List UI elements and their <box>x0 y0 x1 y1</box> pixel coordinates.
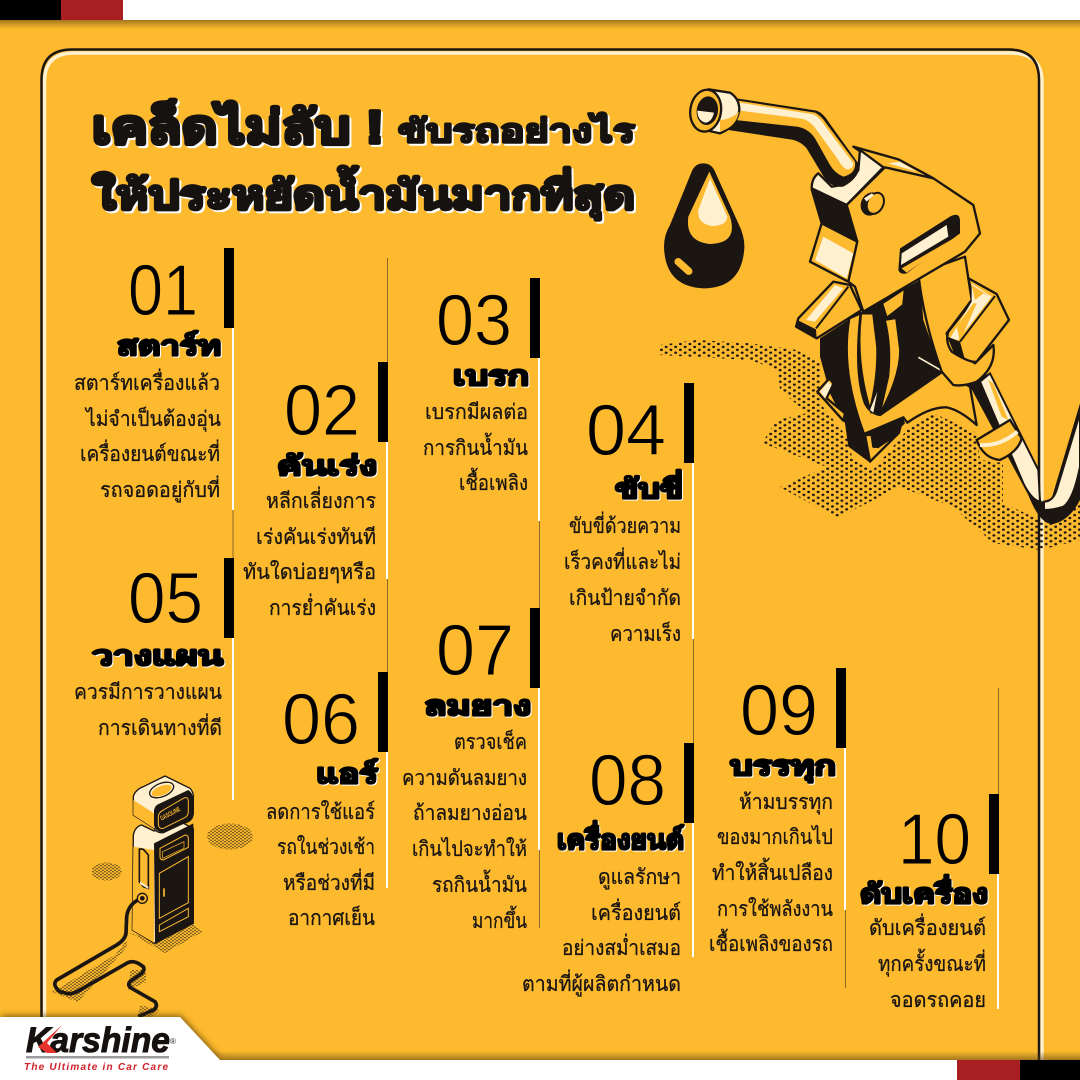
pump head <box>133 776 193 833</box>
item 02 <box>243 258 388 672</box>
dotted shadow under nozzle <box>660 340 1080 550</box>
logo: Karshine: ® <box>170 1037 176 1046</box>
logo: Karshine: The Ultimate in Car Care <box>24 1062 168 1073</box>
item 01: ไม่จำเป็นต้องอุ่น <box>84 405 221 432</box>
item 04: ขับขี่ด้วยความ <box>569 511 681 538</box>
number marker <box>530 278 540 608</box>
illustration: fuel nozzle <box>688 88 1080 524</box>
top colour strip <box>0 0 1080 29</box>
item 05 <box>74 558 234 800</box>
item 03: การกินน้ำมัน <box>423 433 528 460</box>
item 10: 10 <box>898 800 971 880</box>
number marker <box>530 608 540 928</box>
item 07: 07 <box>436 611 514 691</box>
item 05: 05 <box>128 559 203 639</box>
item 07 <box>402 608 540 933</box>
logo panel <box>0 1017 240 1080</box>
number marker <box>378 258 388 672</box>
item 02: หลีกเลี่ยงการ <box>266 486 376 513</box>
number marker <box>378 672 388 888</box>
logo: Karshine: Karshine <box>26 1021 170 1060</box>
item 09: ของมากเกินไป <box>717 825 833 849</box>
hose <box>967 373 1080 524</box>
item 08: ดูแลรักษา <box>598 866 681 890</box>
item 08: 08 <box>589 741 666 821</box>
item 06: 06 <box>282 680 360 760</box>
item 04: 04 <box>586 391 666 471</box>
title: ขับรถอย่างไร <box>398 112 635 149</box>
item 01: รถจอดอยู่กับที่ <box>100 475 220 503</box>
item 10: ดับเครื่อง <box>860 874 988 909</box>
fuel slot <box>898 215 960 274</box>
item 06: หรือช่วงที่มี <box>283 868 375 895</box>
item 01: 01 <box>128 251 198 331</box>
item 09: ห้ามบรรทุก <box>739 791 833 815</box>
item 07: มากขึ้น <box>472 906 527 933</box>
title: เคล็ดไม่ลับ ! <box>92 99 384 153</box>
item 02: ทันใดบ่อยๆหรือ <box>243 560 376 584</box>
bolt <box>857 189 885 219</box>
spout <box>688 88 859 187</box>
number marker <box>836 668 846 988</box>
item 06: ลดการใช้แอร์ <box>266 800 375 824</box>
item 06 <box>266 672 388 930</box>
number marker <box>989 688 999 1009</box>
number marker <box>684 743 694 957</box>
item 01: สตาร์ทเครื่องแล้ว <box>74 368 220 395</box>
number marker <box>684 383 694 743</box>
item 08: เครื่องยนต์ <box>591 898 681 925</box>
item 08 <box>522 741 694 997</box>
illustration: fuel drop <box>664 163 744 288</box>
number marker <box>224 558 234 800</box>
item 06: อากาศเย็น <box>288 904 375 930</box>
number marker <box>224 248 234 558</box>
title <box>92 99 635 221</box>
item 10: จอดรถคอย <box>890 989 986 1012</box>
illustration: fuel pump <box>52 776 253 1018</box>
item 10 <box>860 688 999 1012</box>
item 07: เกินไปจะทำให้ <box>412 837 527 861</box>
item 03 <box>423 278 540 608</box>
item 08: เครื่องยนต์ <box>557 820 684 855</box>
pump body <box>132 823 193 943</box>
item 01: เครื่องยนต์ขณะที่ <box>80 439 220 466</box>
item 01: สตาร์ท <box>117 330 221 361</box>
upper body <box>810 147 980 318</box>
hose <box>55 898 156 1017</box>
item 09: เชื้อเพลิงของรถ <box>709 929 833 956</box>
item 08: อย่างสม่ำเสมอ <box>562 933 681 960</box>
item 09: ทำให้สิ้นเปลือง <box>712 858 833 885</box>
item 03: เชื้อเพลิง <box>459 468 528 495</box>
item 04: เร็วคงที่และไม่ <box>564 547 681 574</box>
item 05: ควรมีการวางแผน <box>74 681 222 704</box>
item 05: วางแผน <box>92 641 224 671</box>
item 09: บรรทุก <box>730 751 836 783</box>
item 02: การย่ำคันเร่ง <box>269 593 376 620</box>
item 07: ความดันลมยาง <box>402 767 527 790</box>
item 05: การเดินทางที่ดี <box>98 713 222 740</box>
item 08: ตามที่ผู้ผลิตกำหนด <box>522 969 681 997</box>
item 07: ตรวจเช็ค <box>454 728 527 754</box>
item 04: เกินป้ายจำกัด <box>569 587 681 610</box>
item 02: คันเร่ง <box>277 451 377 481</box>
item 07: ลมยาง <box>424 691 531 721</box>
item 01 <box>74 248 234 558</box>
item 03: เบรก <box>453 361 529 391</box>
item 02: เร่งคันเร่งทันที <box>256 526 376 549</box>
item 09: 09 <box>740 671 818 751</box>
item 03: เบรกมีผลต่อ <box>425 401 528 424</box>
item 03: 03 <box>436 281 512 361</box>
item 09: การใช้พลังงาน <box>717 897 833 921</box>
item 09 <box>709 668 846 988</box>
dotted patches <box>52 823 253 1018</box>
item 10: ทุกครั้งขณะที่ <box>878 949 986 977</box>
item 06: แอร์ <box>316 758 379 789</box>
illustration: fuel pump: GASOLINE <box>159 806 182 822</box>
item 07: ถ้าลมยางอ่อน <box>413 802 527 825</box>
lower assembly <box>796 257 1009 463</box>
item 04 <box>564 383 694 743</box>
item 10: ดับเครื่องยนต์ <box>869 913 986 940</box>
item 07: รถกินน้ำมัน <box>432 870 527 897</box>
bottom colour strip <box>0 1051 1080 1080</box>
title: ให้ประหยัดน้ำมันมากที่สุด <box>92 166 635 221</box>
item 06: รถในช่วงเช้า <box>277 835 375 859</box>
item 04: ความเร็ง <box>610 620 681 646</box>
item 02: 02 <box>284 371 360 451</box>
item 04: ขับขี่ <box>615 469 683 504</box>
